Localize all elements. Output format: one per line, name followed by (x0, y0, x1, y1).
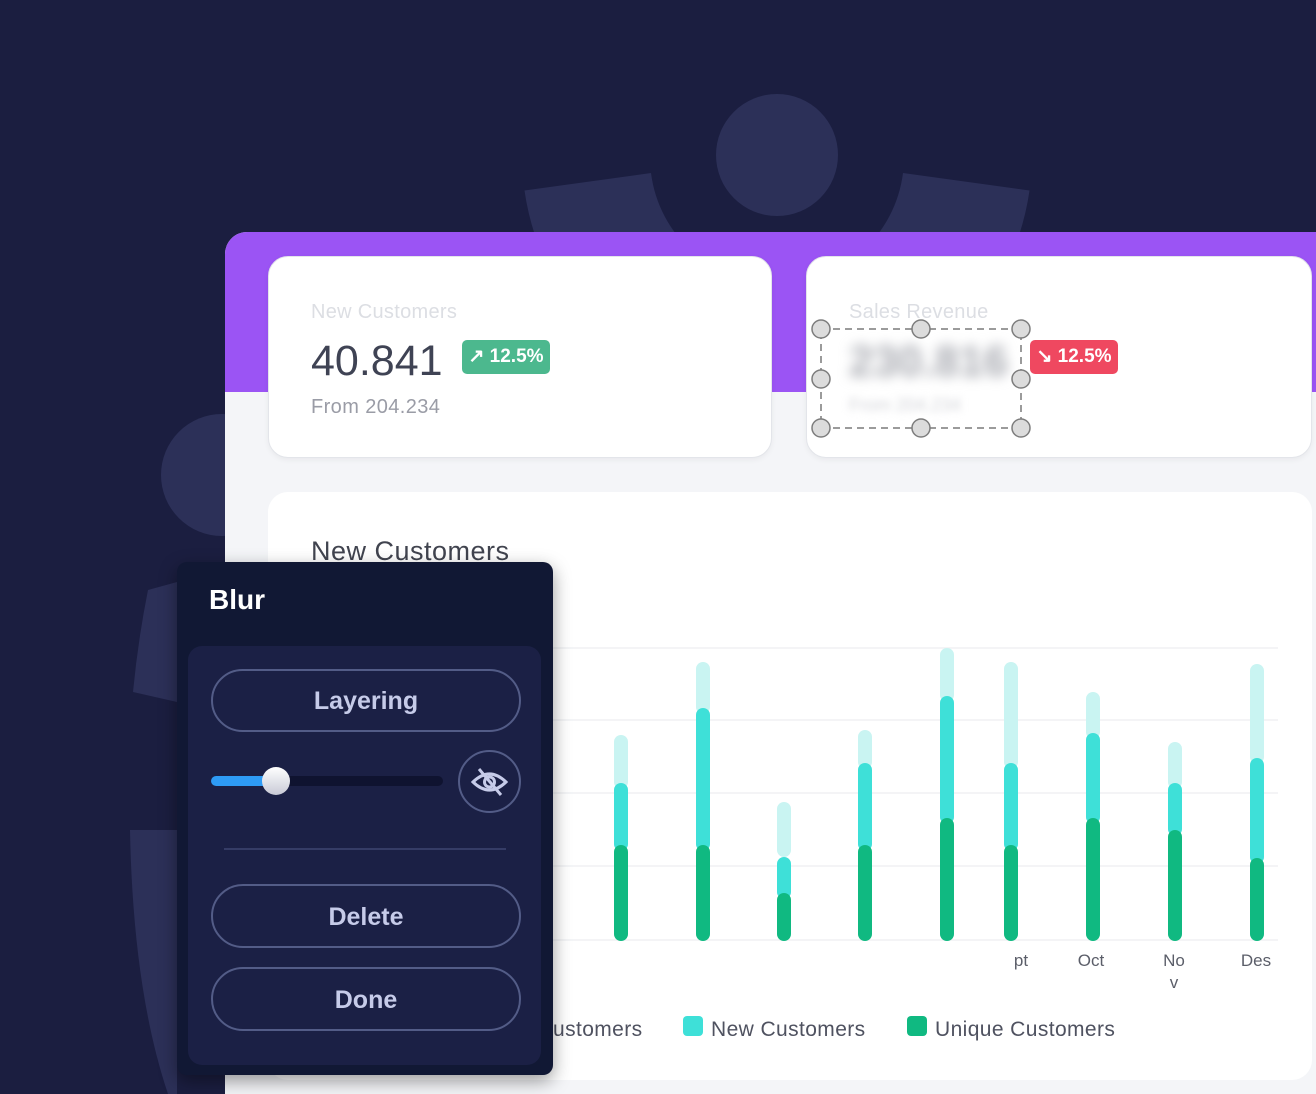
button: done (211, 967, 521, 1031)
sub text: From 204.234 (311, 396, 440, 418)
big number: 40.841 (311, 337, 443, 385)
selection box with handles (811, 319, 1031, 438)
button: layering (211, 669, 521, 732)
badge down (1030, 340, 1118, 374)
card label: Sales Revenue (849, 301, 989, 323)
x labels: Oct (1078, 951, 1104, 970)
badge up: ↗ 12.5% (468, 346, 544, 367)
blurred sub: From 204.234 (849, 395, 961, 415)
button: done: Done (335, 986, 397, 1014)
icon: hidden eye (458, 750, 521, 813)
legend: Unique Customers (935, 1018, 1115, 1041)
x labels (1014, 951, 1271, 992)
slider (211, 767, 443, 795)
chart panel (268, 492, 1312, 1080)
button: layering: Layering (314, 687, 418, 715)
x labels: pt (1014, 951, 1028, 970)
legend: ustomers (553, 1018, 643, 1041)
x labels: No (1163, 951, 1185, 970)
blurred value: 230.816 (849, 337, 1008, 386)
popup title: Blur (209, 584, 265, 615)
card: new customers (268, 256, 772, 458)
x labels: v (1170, 973, 1179, 992)
dashboard panel (225, 232, 1316, 1094)
button: delete: Delete (328, 903, 404, 931)
card label: New Customers (311, 301, 457, 323)
legend: New Customers (711, 1018, 866, 1041)
card: sales revenue (blurred) (806, 256, 1312, 458)
chart title: New Customers (311, 536, 510, 566)
inner panel (188, 646, 541, 1065)
badge up (462, 340, 550, 374)
button: delete (211, 884, 521, 948)
badge down: ↘ 12.5% (1036, 346, 1112, 367)
x labels: Des (1241, 951, 1271, 970)
legend (553, 1016, 1115, 1041)
bar chart (553, 648, 1278, 992)
popup: blur controls (177, 562, 553, 1075)
